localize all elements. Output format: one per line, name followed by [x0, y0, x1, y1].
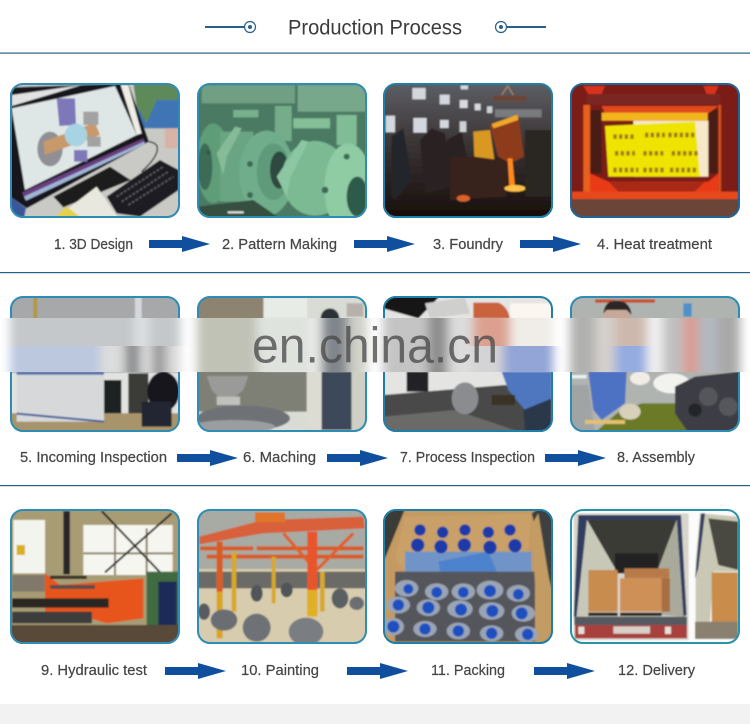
watermark text: en.china.cn [252, 318, 498, 374]
step label 10: 10. Painting [241, 663, 319, 679]
icon: right heading ornament [496, 22, 546, 32]
icon: left heading ornament [205, 22, 256, 32]
photo panel: foundry [383, 83, 553, 218]
photo panel: 3D design [10, 83, 180, 218]
arrow 6 to 7 [327, 450, 388, 466]
watermark band [0, 318, 750, 374]
arrow 11 to 12 [534, 663, 595, 679]
photo panel: packing [383, 509, 553, 645]
step label 3: 3. Foundry [433, 237, 504, 253]
photo panel: delivery [570, 509, 740, 645]
photo panel: hydraulic test [10, 509, 180, 645]
step label 5: 5. Incoming Inspection [20, 450, 167, 466]
arrow 1 to 2 [149, 236, 210, 252]
arrow 9 to 10 [165, 663, 226, 679]
title: Production Process [288, 16, 462, 40]
photo panel: pattern making [197, 83, 367, 218]
step label 11: 11. Packing [431, 663, 505, 679]
arrow 2 to 3 [354, 236, 415, 252]
step label 9: 9. Hydraulic test [41, 663, 147, 679]
step label 7: 7. Process Inspection [400, 450, 535, 466]
photo panel: incoming inspection [10, 296, 180, 433]
step label 4: 4. Heat treatment [597, 237, 712, 253]
photo panel: heat treatment [570, 83, 740, 218]
photo panel: machining [192, 296, 367, 433]
photo panel: process inspection [383, 296, 553, 433]
step label 12: 12. Delivery [618, 663, 696, 679]
arrow 10 to 11 [347, 663, 408, 679]
arrow 3 to 4 [520, 236, 581, 252]
step label 2: 2. Pattern Making [222, 237, 337, 253]
step label 6: 6. Maching [243, 450, 316, 466]
photo panel: assembly [570, 296, 740, 433]
step label 8: 8. Assembly [617, 450, 696, 466]
arrow 7 to 8 [545, 450, 606, 466]
bottom footer strip [0, 704, 750, 724]
photo panel: painting [197, 509, 367, 646]
step label 1: 1. 3D Design [54, 237, 133, 253]
arrow 5 to 6 [177, 450, 238, 466]
